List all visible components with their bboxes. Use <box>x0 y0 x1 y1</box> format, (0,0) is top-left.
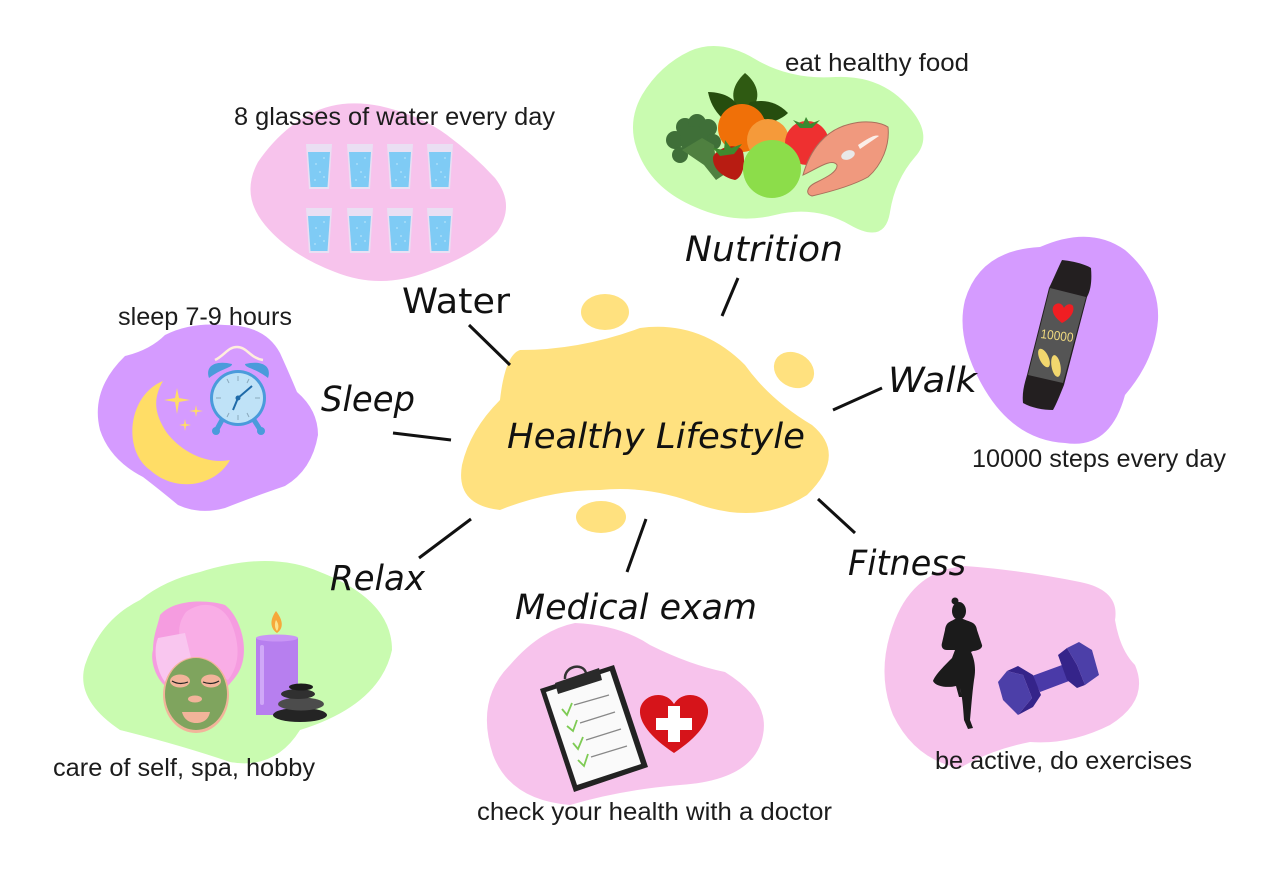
water caption: 8 glasses of water every day <box>234 103 555 131</box>
connector: walk <box>833 388 882 410</box>
connector: relax <box>419 519 471 558</box>
icon: fitness band <box>1023 260 1091 410</box>
small droplets <box>576 294 821 533</box>
icon: clipboard checklist <box>540 665 648 792</box>
panel: sleep <box>98 303 318 511</box>
heading: medical exam: Medical exam <box>515 588 757 628</box>
panel: water <box>234 103 555 281</box>
connector: sleep <box>393 433 451 440</box>
fitness caption: be active, do exercises <box>935 747 1192 775</box>
fitness blob <box>884 566 1139 768</box>
icon: alarm clock <box>208 347 269 435</box>
panel: medical exam <box>477 623 832 826</box>
sleep blob <box>98 324 318 511</box>
walk blob <box>962 237 1158 444</box>
panel: walk <box>962 237 1226 473</box>
icon: fruit, vegetables and salmon <box>666 73 888 198</box>
panel: relax <box>53 561 392 782</box>
icon: heart with medical cross <box>640 695 708 753</box>
sleep caption: sleep 7-9 hours <box>118 303 292 331</box>
medical blob <box>487 623 764 805</box>
icon: candle and stones <box>256 611 327 722</box>
water blob <box>250 103 506 281</box>
medical caption: check your health with a doctor <box>477 798 832 826</box>
central yellow blob <box>461 327 829 513</box>
panel: central blob <box>461 294 829 533</box>
heading: water: Water <box>402 282 511 322</box>
connector: water <box>469 325 510 365</box>
icon: face mask with towel <box>152 601 244 733</box>
heading: nutrition: Nutrition <box>685 230 843 270</box>
heading: fitness: Fitness <box>848 544 966 584</box>
nutrition blob <box>633 46 923 233</box>
connector: fitness <box>818 499 855 533</box>
nutrition caption: eat healthy food <box>785 49 969 77</box>
icon: dumbbell <box>998 642 1099 715</box>
icon: yoga silhouette <box>933 598 982 729</box>
relax blob <box>83 561 392 763</box>
title: Healthy Lifestyle <box>507 417 805 457</box>
step count: 10000 <box>1040 326 1074 345</box>
connector: medical exam <box>627 519 646 572</box>
panel: nutrition <box>633 46 969 233</box>
heading: relax: Relax <box>330 559 425 599</box>
icon: eight glasses of water <box>306 144 453 253</box>
walk caption: 10000 steps every day <box>972 445 1226 473</box>
icon: crescent moon and stars <box>132 381 230 484</box>
heading: walk: Walk <box>888 361 979 401</box>
connector: nutrition <box>722 278 738 316</box>
heading: sleep: Sleep <box>321 380 415 420</box>
footprints <box>1036 347 1062 378</box>
relax caption: care of self, spa, hobby <box>53 754 316 782</box>
heart <box>1053 303 1073 323</box>
panel: fitness <box>884 566 1192 775</box>
